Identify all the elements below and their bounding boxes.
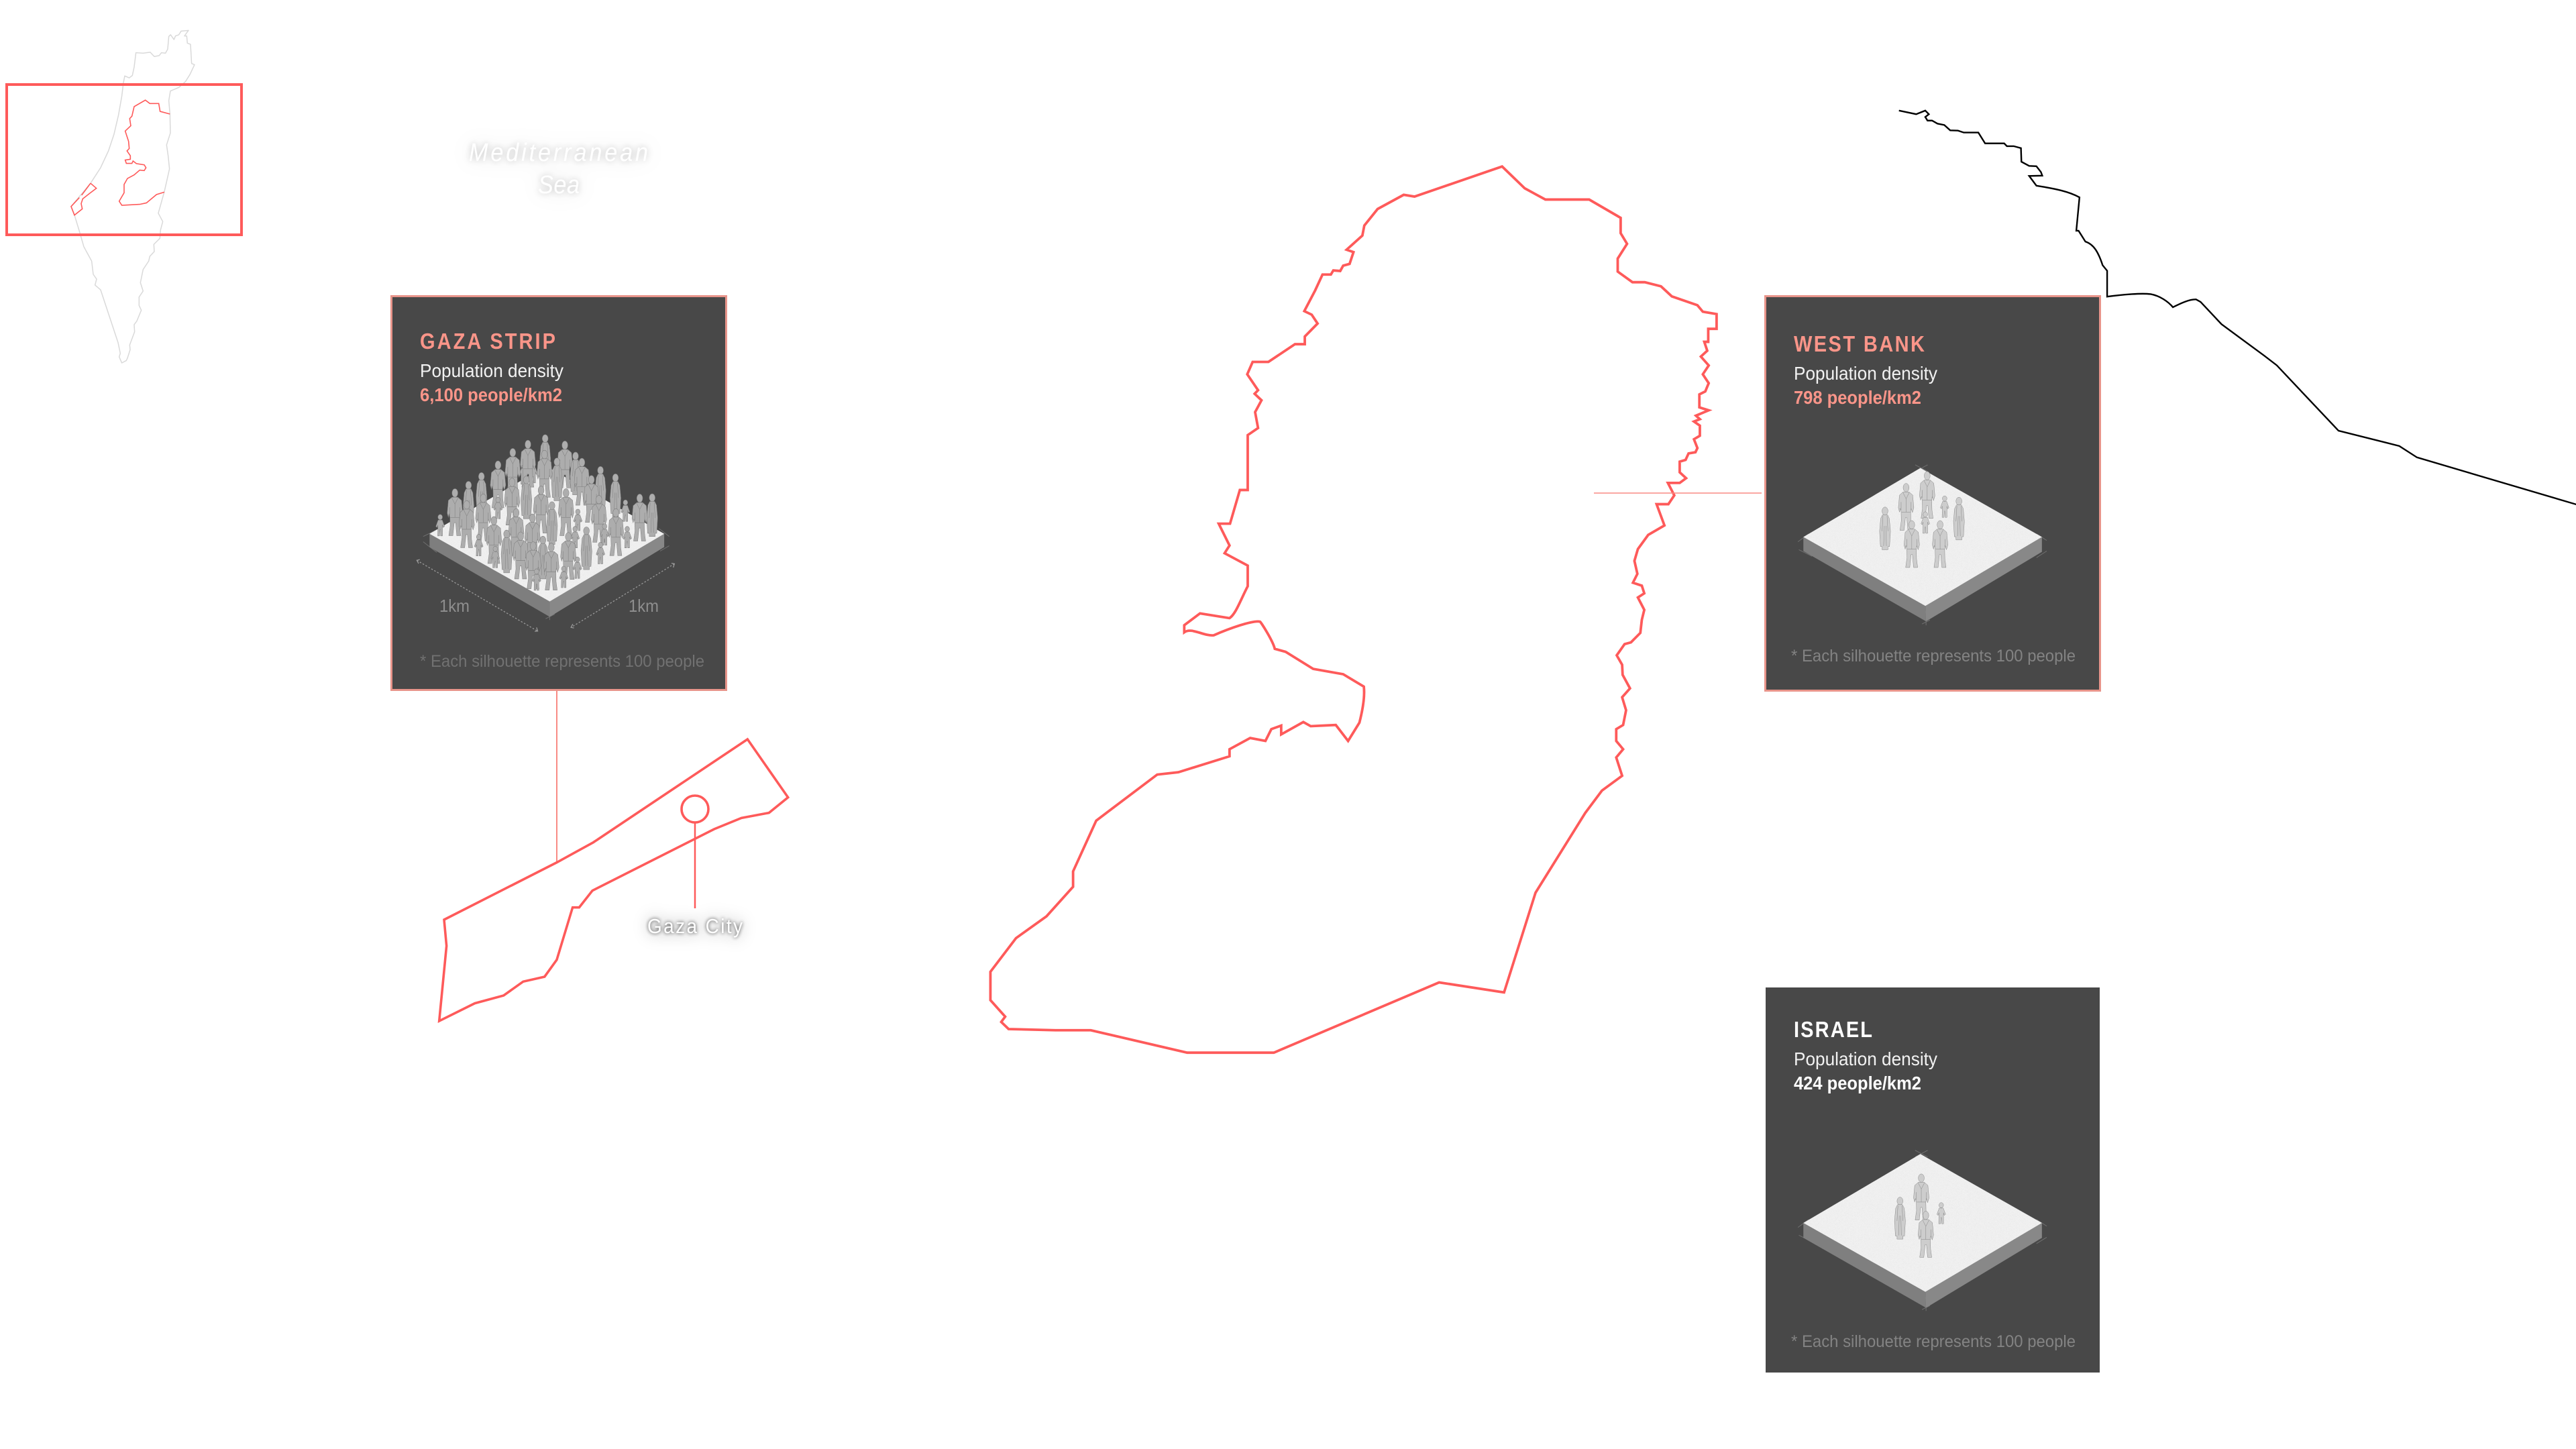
sea label: Sea — [538, 170, 580, 199]
locator: West Bank and Gaza highlights — [71, 100, 170, 215]
silhouettes — [1880, 472, 1964, 568]
label: Gaza City: Gaza City — [647, 915, 743, 938]
Israel footnote: * Each silhouette represents 100 people — [1791, 1332, 2076, 1351]
dimension label left: 1km — [439, 596, 470, 616]
sea label: Mediterranean — [469, 138, 648, 166]
Gaza density value: 6,100 people/km2 — [420, 384, 562, 405]
Israel 1 km2 block with people — [1798, 1150, 2047, 1311]
panel: Israel — [1766, 987, 2100, 1373]
silhouettes — [1894, 1174, 1945, 1257]
West Bank footnote: * Each silhouette represents 100 people — [1791, 647, 2076, 665]
Gaza density label: Population density — [420, 360, 564, 381]
crowd of silhouettes — [436, 435, 657, 590]
Gaza footnote: * Each silhouette represents 100 people — [420, 652, 704, 671]
West Bank density value: 798 people/km2 — [1794, 387, 1921, 408]
map: black border line — [1899, 111, 2576, 504]
West Bank 1 km2 block with people — [1798, 465, 2047, 625]
West Bank density label: Population density — [1794, 363, 1937, 384]
Israel density label: Population density — [1794, 1049, 1937, 1069]
West Bank card background — [1766, 297, 2100, 691]
locator: Israel outline — [71, 30, 195, 363]
map: West Bank outline — [990, 166, 1717, 1053]
dimension arrow: left — [417, 559, 538, 631]
locator: selection rectangle — [7, 85, 241, 235]
map: Gaza Strip outline — [439, 739, 788, 1021]
connector: Gaza card to map — [556, 691, 557, 863]
Israel card background — [1766, 987, 2100, 1373]
Gaza card background — [392, 297, 726, 690]
panel: West Bank — [1766, 297, 2100, 691]
map marker: Gaza City — [682, 796, 708, 908]
sea label — [469, 138, 648, 199]
Gaza heading: GAZA STRIP — [420, 329, 555, 354]
Israel heading: ISRAEL — [1794, 1017, 1872, 1042]
Gaza 1 km2 block with crowd — [417, 435, 674, 631]
panel: Gaza Strip — [392, 297, 726, 690]
dimension arrow: right — [571, 564, 674, 628]
locator map — [7, 30, 241, 363]
Israel density value: 424 people/km2 — [1794, 1073, 1921, 1093]
dimension label right: 1km — [629, 596, 659, 616]
connector: West Bank map to card — [1594, 492, 1762, 494]
West Bank heading: WEST BANK — [1794, 331, 1925, 356]
